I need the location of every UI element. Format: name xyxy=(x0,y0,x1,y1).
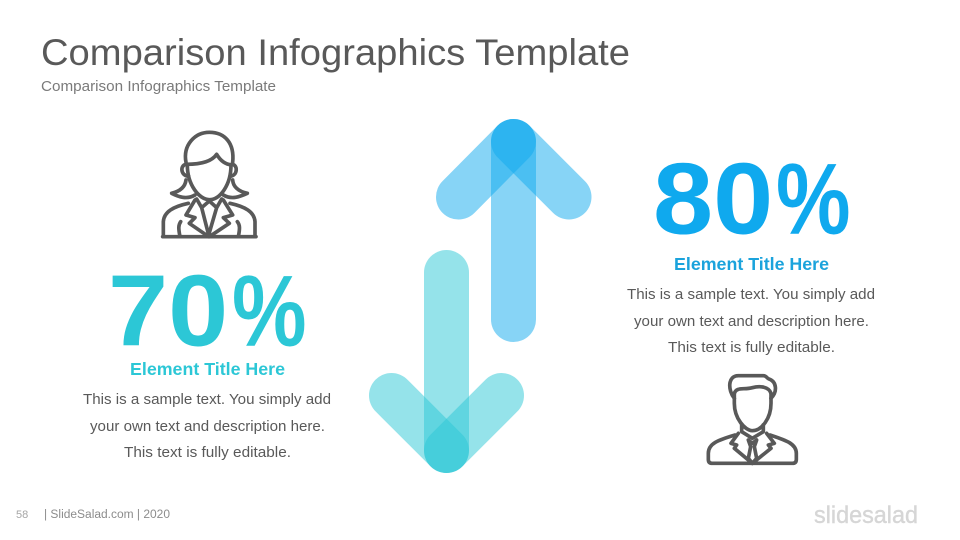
stat: 70% xyxy=(108,254,307,368)
stat: 70%: % xyxy=(232,254,307,367)
description left: your own text and description here. xyxy=(90,418,325,435)
logo: slidesalad xyxy=(814,502,918,529)
stat: 80%: % xyxy=(776,142,851,255)
stat: 80% xyxy=(653,142,851,256)
description left xyxy=(83,391,331,461)
element title left: Element Title Here xyxy=(130,359,285,379)
stat: 70%: 70 xyxy=(108,255,228,368)
subtitle: Comparison Infographics Template xyxy=(41,78,276,95)
description right: This text is fully editable. xyxy=(668,339,835,356)
element title right: Element Title Here xyxy=(674,254,829,274)
arrow: down xyxy=(392,272,502,450)
description left: This is a sample text. You simply add xyxy=(83,391,331,408)
description right: your own text and description here. xyxy=(634,313,869,330)
icon: businessman xyxy=(708,376,796,463)
footer text: | SlideSalad.com | 2020 xyxy=(44,509,170,521)
description left: This text is fully editable. xyxy=(124,444,291,461)
icon: businesswoman xyxy=(163,132,256,237)
stat: 80%: 80 xyxy=(653,143,773,256)
description right: This is a sample text. You simply add xyxy=(627,286,875,303)
description right xyxy=(627,286,875,356)
page number: 58 xyxy=(16,509,28,521)
title: Comparison Infographics Template xyxy=(41,32,630,73)
arrow: up xyxy=(458,142,569,320)
